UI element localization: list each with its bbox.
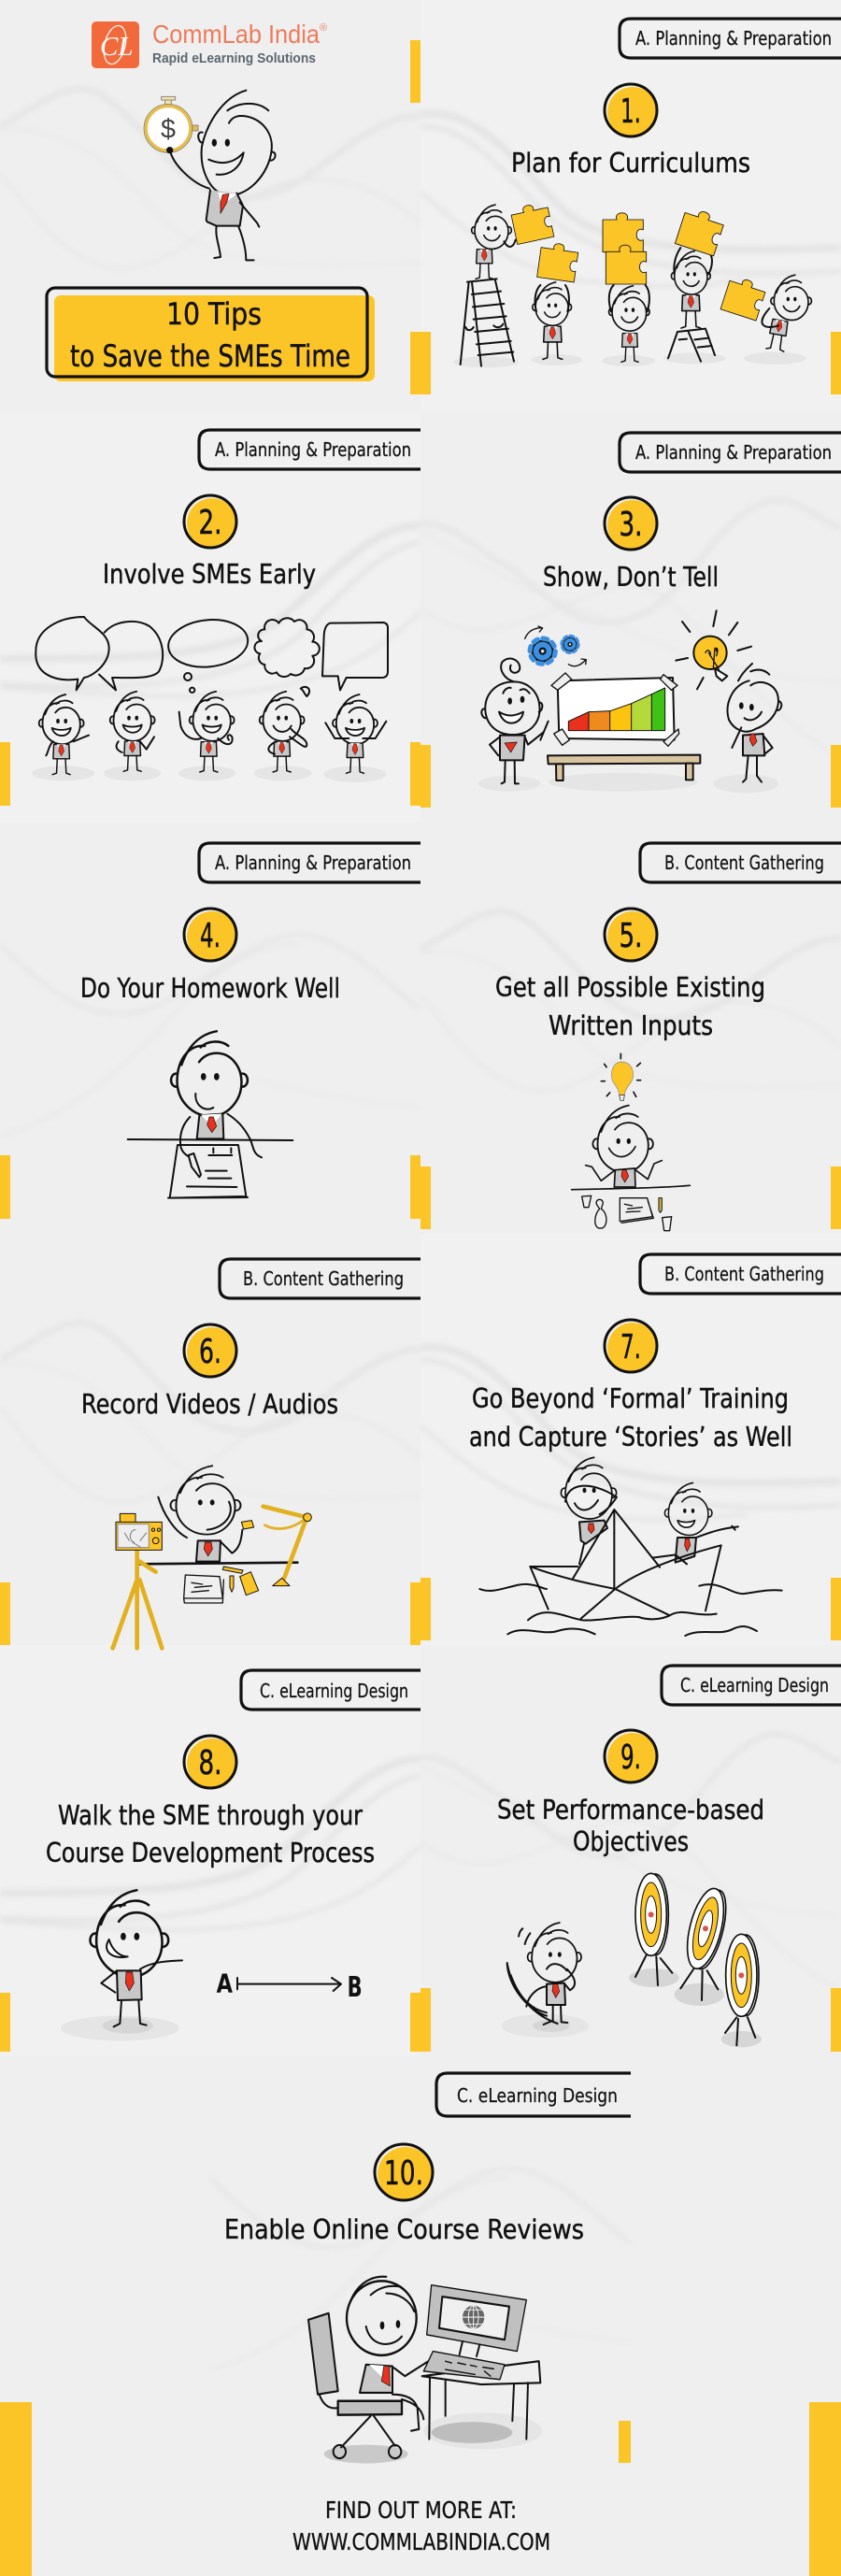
number badge (184, 495, 237, 549)
section label (199, 843, 420, 882)
heading: Get all Possible Existing (495, 972, 765, 1003)
footer call to action: FIND OUT MORE AT: (325, 2497, 517, 2524)
heading: Show, Don’t Tell (543, 562, 719, 593)
illustration: man writing at a desk (128, 1031, 292, 1198)
section label (640, 843, 841, 882)
lighter panel backgrounds (0, 0, 841, 2056)
heading: Record Videos / Audios (81, 1389, 338, 1420)
number badge (605, 1730, 658, 1783)
illustration: man holding stopwatch (144, 91, 276, 260)
panel: tip 4 (80, 843, 420, 1198)
section label (640, 1254, 841, 1294)
logo (92, 20, 327, 68)
number badge: 2. (198, 504, 222, 542)
section label (241, 1670, 420, 1710)
section label: C. eLearning Design (260, 1680, 408, 1702)
logo: CL (100, 32, 133, 62)
number badge (375, 2144, 434, 2201)
number badge: 4. (200, 917, 221, 955)
illustration: man holding stopwatch: $ (161, 114, 176, 144)
heading: Involve SMEs Early (103, 559, 316, 590)
heading: Plan for Curriculums (511, 148, 750, 179)
number badge (605, 909, 658, 962)
section label (199, 430, 420, 469)
section label: C. eLearning Design (457, 2084, 618, 2107)
title banner: to Save the SMEs Time (70, 338, 350, 374)
number badge (184, 909, 237, 962)
logo: Rapid eLearning Solutions (152, 51, 316, 66)
heading (46, 1800, 375, 1868)
heading (497, 1795, 764, 1857)
number badge: 8. (198, 1744, 222, 1782)
illustration: team assembling puzzle (453, 201, 811, 367)
logo: ® (320, 22, 327, 34)
heading (469, 1383, 792, 1453)
title banner (47, 288, 375, 381)
section label (436, 2073, 631, 2116)
number badge: 7. (620, 1328, 641, 1367)
panel: header (47, 20, 375, 381)
illustration: man pointing to A-to-B arrow: B (348, 1971, 363, 2004)
number badge: 3. (619, 506, 643, 544)
number badge: 1. (620, 93, 641, 131)
panel: tip 7 (469, 1254, 841, 1636)
illustration: two men in a paper boat (479, 1457, 782, 1636)
panel: tip 3 (478, 433, 841, 793)
number badge (184, 1324, 237, 1378)
illustration: man pointing to A-to-B arrow (61, 1890, 363, 2040)
section label (662, 1666, 841, 1705)
heading: Do Your Homework Well (80, 973, 340, 1004)
illustration: man with idea at desk (572, 1053, 690, 1231)
heading: Written Inputs (549, 1010, 713, 1041)
title banner: 10 Tips (166, 296, 262, 332)
section label (620, 19, 841, 58)
heading (495, 972, 765, 1041)
heading: Walk the SME through your (58, 1800, 363, 1831)
section label (620, 433, 841, 472)
footer call to action (292, 2497, 550, 2555)
number badge: 6. (199, 1333, 221, 1371)
heading: Objectives (573, 1826, 689, 1857)
number badge (605, 1320, 658, 1373)
number badge: 10. (384, 2154, 423, 2193)
panel: tip 5 (495, 843, 841, 1231)
panel: tip 1 (453, 19, 841, 367)
logo: CommLab India (152, 20, 320, 49)
illustration: man pointing to A-to-B arrow: A (217, 1968, 233, 1999)
heading: Go Beyond ‘Formal’ Training (472, 1383, 789, 1414)
section label: A. Planning & Preparation (215, 852, 411, 874)
heading: Course Development Process (46, 1838, 375, 1868)
panel: tip 10 (224, 2073, 631, 2555)
panel: tip 6 (81, 1259, 420, 1648)
illustration: man at computer (308, 2277, 542, 2463)
panel: tip 8 (46, 1670, 420, 2040)
panel: tip 9 (497, 1666, 841, 2047)
number badge: 9. (620, 1739, 641, 1777)
footer call to action: WWW.COMMLABINDIA.COM (292, 2528, 550, 2555)
heading: Set Performance-based (497, 1795, 764, 1825)
illustration: man recording video and audio (113, 1466, 311, 1648)
number badge (184, 1736, 237, 1789)
illustration: two people presenting chart (478, 610, 781, 793)
number badge (605, 84, 658, 137)
section label: B. Content Gathering (243, 1267, 404, 1290)
number badge: 5. (619, 917, 643, 955)
heading: Enable Online Course Reviews (224, 2214, 584, 2245)
panel: tip 2 (32, 430, 420, 782)
section label (220, 1259, 420, 1298)
number badge (605, 497, 658, 551)
section label: A. Planning & Preparation (215, 438, 411, 461)
illustration: archer with three targets (502, 1873, 762, 2047)
illustration: five men with speech bubbles (32, 616, 388, 782)
